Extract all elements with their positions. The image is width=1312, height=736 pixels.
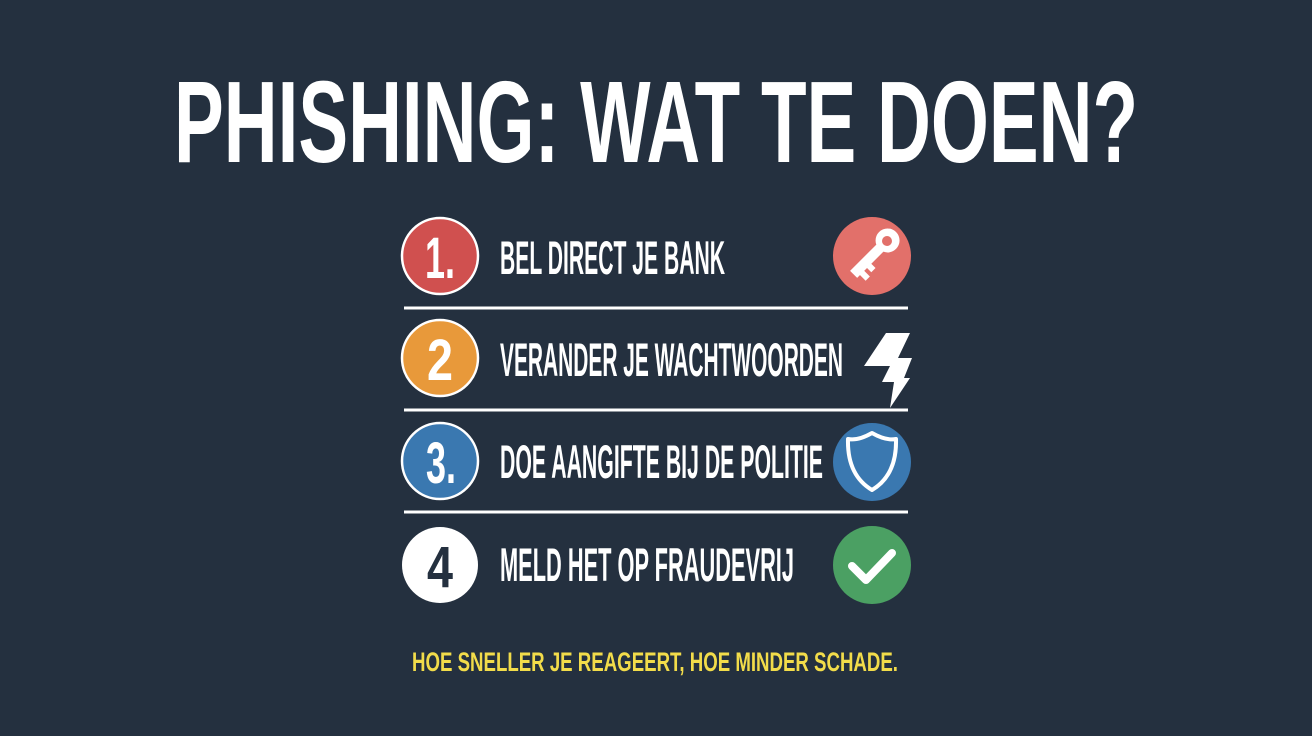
step 2	[402, 320, 912, 408]
step 4: MELD HET OP FRAUDEVRIJ	[500, 538, 794, 591]
number badge 3: 3.	[426, 431, 456, 496]
step 2: VERANDER JE WACHTWOORDEN	[500, 333, 843, 386]
number badge 4: 4	[427, 535, 453, 600]
number badge 1: 1.	[425, 226, 455, 291]
step 1	[402, 217, 911, 295]
icon: shield	[833, 423, 911, 501]
step list	[402, 217, 912, 604]
icon: checkmark	[833, 526, 911, 604]
step 4	[402, 526, 911, 604]
number badge 4	[402, 527, 478, 603]
number badge 2	[402, 320, 478, 396]
icon: lightning	[864, 333, 912, 408]
step 3: DOE AANGIFTE BIJ DE POLITIE	[500, 435, 823, 488]
step 3	[402, 423, 911, 501]
footer tagline: HOE SNELLER JE REAGEERT, HOE MINDER SCHADE.	[412, 647, 898, 677]
icon: key	[833, 217, 911, 295]
number badge 2: 2	[427, 328, 453, 393]
number badge 3	[402, 423, 478, 499]
step 1: BEL DIRECT JE BANK	[500, 231, 725, 284]
number badge 1	[402, 218, 478, 294]
